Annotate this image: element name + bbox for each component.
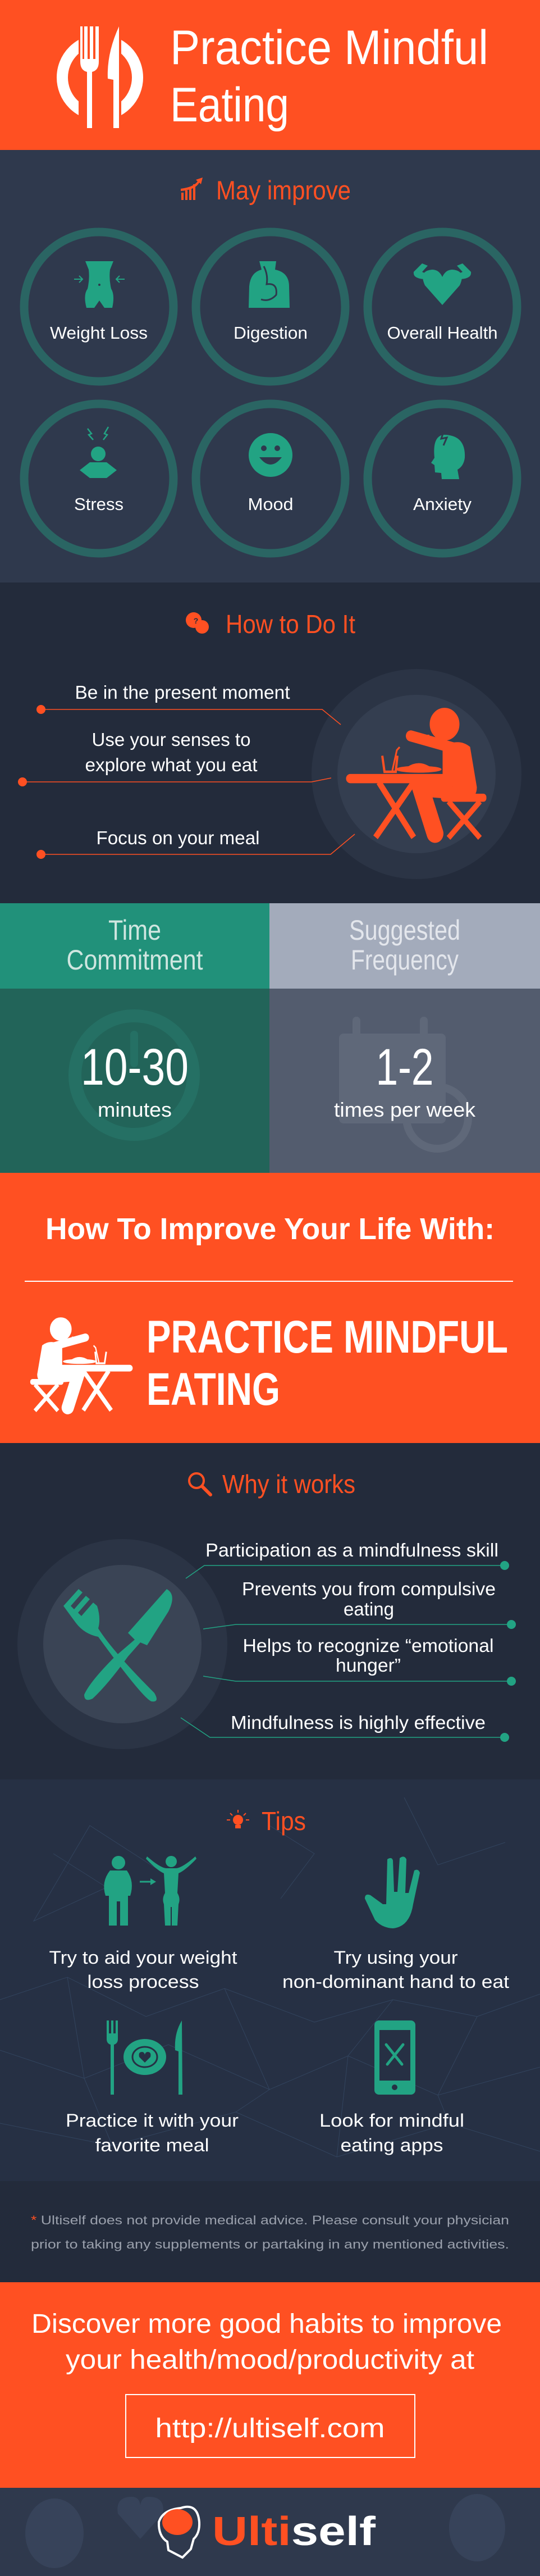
panel: suggested frequency [269,903,540,1173]
benefit: stress [24,404,173,553]
panel: time commitment: minutes [98,1098,172,1121]
reason: emotional hunger: hunger” [336,1655,401,1676]
icon: faint clock [68,1009,200,1141]
panel: time commitment: Commitment [66,944,203,976]
reason: compulsive eating: eating [344,1599,394,1619]
panel: time commitment: Time [108,914,161,946]
header banner [0,0,540,150]
reason: participation [186,1540,509,1578]
disclaimer: * Ultiself does not provide medical advice. Please consult your physician [31,2213,509,2227]
step: use your senses: Use your senses to [92,729,250,750]
panel: how to improve banner [0,1173,540,1443]
reason: compulsive eating [203,1578,516,1629]
benefit: digestion [196,232,345,381]
icon: white diner [30,1318,132,1411]
step: use your senses: explore what you eat [85,754,257,775]
tip: weight loss process: Try to aid your weight [49,1947,237,1968]
tip: favorite meal: Practice it with your [66,2110,239,2131]
step: use your senses [18,729,331,786]
panel: time commitment: 10-30 [81,1039,189,1096]
call to action [0,2282,540,2488]
url button [126,2395,415,2457]
tip: weight loss process: loss process [88,1972,199,1992]
heading: how to do it: How to Do It [226,609,355,639]
benefit: mood: Mood [248,494,293,514]
call to action: Discover more good habits to improve [31,2309,502,2339]
step: be in the present moment [36,682,341,725]
benefit: mood [196,404,345,553]
illustration: diner in circle [312,669,521,879]
tip: favorite meal: favorite meal [95,2135,209,2155]
tip: favorite meal [66,2020,239,2155]
tip: non-dominant hand [282,1856,509,1992]
url button: http://ultiself.com [155,2414,385,2443]
heading: how to do it: ? [194,616,198,625]
benefit: weight loss [24,232,173,381]
heading: tips: Tips [262,1806,306,1836]
header banner: Eating [170,78,289,132]
step: be in the present moment: Be in the present moment [75,682,290,703]
benefit: anxiety [368,404,517,553]
panel: why it works [0,1443,540,1780]
tip: mindful eating apps: Look for mindful [319,2110,464,2131]
heading: how to improve: How To Improve Your Life With: [45,1212,495,1246]
panel: time commitment [0,903,269,1173]
footer logo: Ulti self [212,2509,376,2554]
tip: non-dominant hand: non-dominant hand to eat [282,1972,509,1992]
tip: non-dominant hand: Try using your [333,1947,458,1968]
benefit: stress: Stress [74,494,123,514]
title: Practice Mindful [170,21,488,75]
heading: may improve: May improve [216,175,351,205]
reason: emotional hunger: Helps to recognize “emotional [242,1635,494,1656]
reason: highly effective [181,1712,509,1742]
panel: may improve [0,150,540,582]
panel: suggested frequency: times per week [334,1098,476,1121]
benefit: overall health: Overall Health [387,323,497,343]
benefit: overall health [368,232,517,381]
panel: how to do it [0,582,540,903]
tip: mindful eating apps [319,2020,464,2155]
call to action: your health/mood/productivity at [66,2345,474,2375]
panel: suggested frequency: Suggested [349,914,460,946]
reason: participation: Participation as a mindfulness skill [205,1540,498,1560]
benefit: digestion: Digestion [234,323,308,343]
panel: suggested frequency: Frequency [351,944,459,976]
reason: emotional hunger [203,1635,516,1686]
heading: why it works: Why it works [222,1469,355,1499]
reason: highly effective: Mindfulness is highly effective [231,1712,486,1733]
tip: mindful eating apps: eating apps [340,2135,443,2155]
logo: head icon [159,2507,199,2557]
disclaimer [0,2181,540,2282]
panel: tips [0,1779,540,2181]
illustration: fork and knife [17,1539,227,1749]
icon: faint calendar [339,1017,468,1149]
title: practice mindful eating [147,1312,508,1415]
panel: suggested frequency: 1-2 [376,1039,433,1096]
icon: plate with fork and knife [62,25,138,132]
heading: tips [227,1806,306,1836]
step: focus on your meal: Focus on your meal [97,827,259,848]
benefit: weight loss: Weight Loss [50,323,148,343]
title: practice mindful eating: EATING [147,1364,280,1415]
benefit: anxiety: Anxiety [413,494,472,514]
tip: weight loss process [49,1856,237,1992]
reason: compulsive eating: Prevents you from compulsive [242,1578,496,1599]
step: focus on your meal [36,827,355,859]
disclaimer: prior to taking any supplements or partaking in any mentioned activities. [31,2237,509,2251]
footer logo [0,2488,540,2576]
